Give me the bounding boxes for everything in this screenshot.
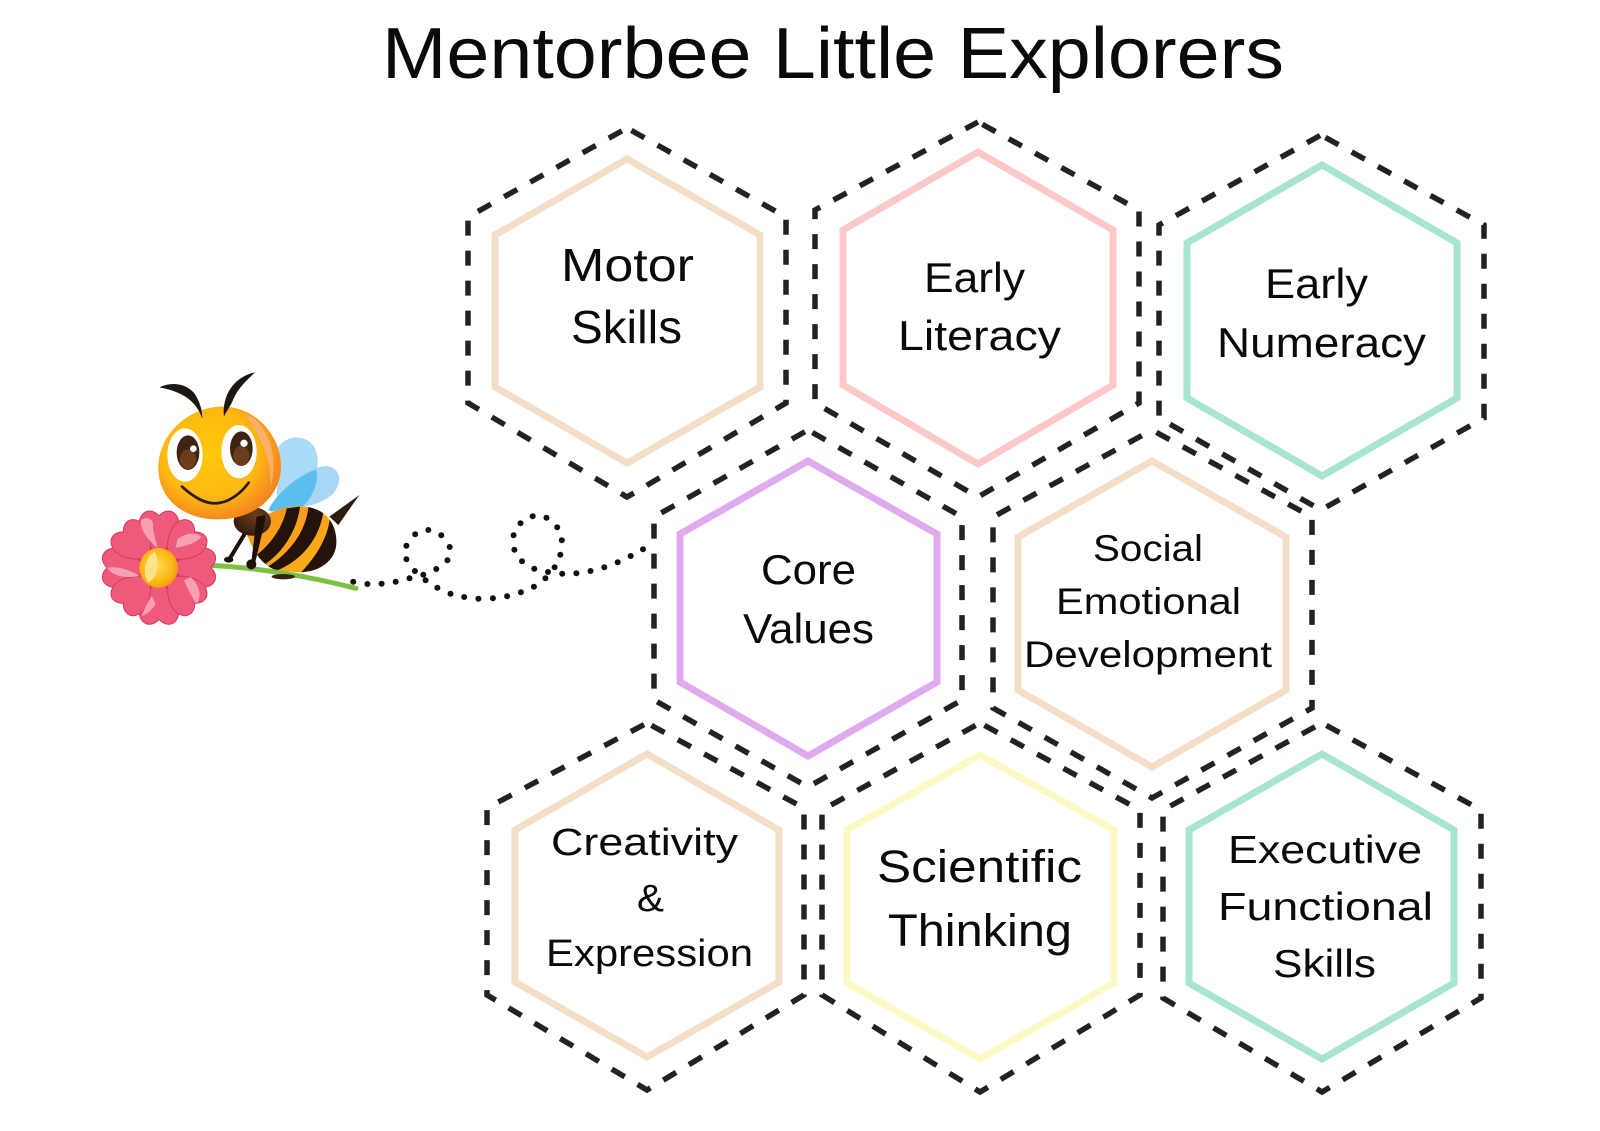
eyes [167,425,257,482]
label: Skills [571,301,682,353]
label: & [637,878,664,920]
dashed outline [487,723,804,1090]
label: Core [761,546,856,593]
label: Values [743,605,874,652]
antennae [159,372,255,419]
label: Development [1024,634,1273,675]
dashed outline [993,430,1312,798]
dark back petals [105,513,213,622]
dashed outline [1159,135,1484,510]
label: Early [924,254,1025,301]
inner outline [1018,461,1286,767]
label [561,239,694,353]
label [877,841,1082,956]
label [898,254,1061,359]
hexagon: Motor Skills [468,128,786,497]
dashed outline [815,122,1139,497]
front leg [251,515,265,562]
label: Numeracy [1217,319,1426,366]
icon: bee on flower [102,372,359,624]
dashed outline [468,128,786,497]
petal highlights [107,518,202,616]
inner outline [1189,754,1454,1059]
feet [224,557,295,579]
dotted flight path [350,513,646,602]
hexagon: Creativity and Expression [487,723,804,1090]
label: Expression [546,933,753,975]
wings [268,437,339,512]
label: Thinking [888,905,1072,956]
hexagon: Early Literacy [815,122,1139,497]
title: Mentorbee Little Explorers [382,14,1284,94]
hexagon: Scientific Thinking [822,723,1140,1092]
stinger [329,495,359,525]
label: Executive [1228,829,1422,872]
label: Functional [1218,886,1433,929]
label: Motor [561,239,694,291]
inner outline [680,461,937,756]
inner outline [847,755,1114,1059]
label [546,822,753,975]
hexagon: Social Emotional Development [993,430,1312,798]
hexagon: Core Values [654,430,962,787]
inner outline [515,754,779,1057]
dashed outline [1163,723,1481,1092]
pink petals [102,511,216,624]
dashed outline [654,430,962,787]
hexagon: Early Numeracy [1159,135,1484,510]
thorax [234,507,271,536]
back leg [229,535,244,559]
label [743,546,874,652]
label: Literacy [898,312,1061,359]
label [1024,528,1273,675]
smile [182,483,249,503]
abdomen [247,506,336,572]
label [1218,829,1433,986]
label: Creativity [551,822,738,864]
label [1217,260,1426,366]
flower [102,511,216,624]
label: Scientific [877,841,1082,892]
inner outline [495,159,760,463]
inner outline [1187,165,1457,476]
head [158,407,281,519]
label: Social [1093,528,1203,569]
label: Emotional [1056,581,1241,622]
stem [210,565,356,588]
hexagon: Executive Functional Skills [1163,723,1481,1092]
inner outline [843,152,1113,464]
dashed outline [822,723,1140,1092]
label: Early [1265,260,1368,307]
label: Skills [1273,943,1376,986]
